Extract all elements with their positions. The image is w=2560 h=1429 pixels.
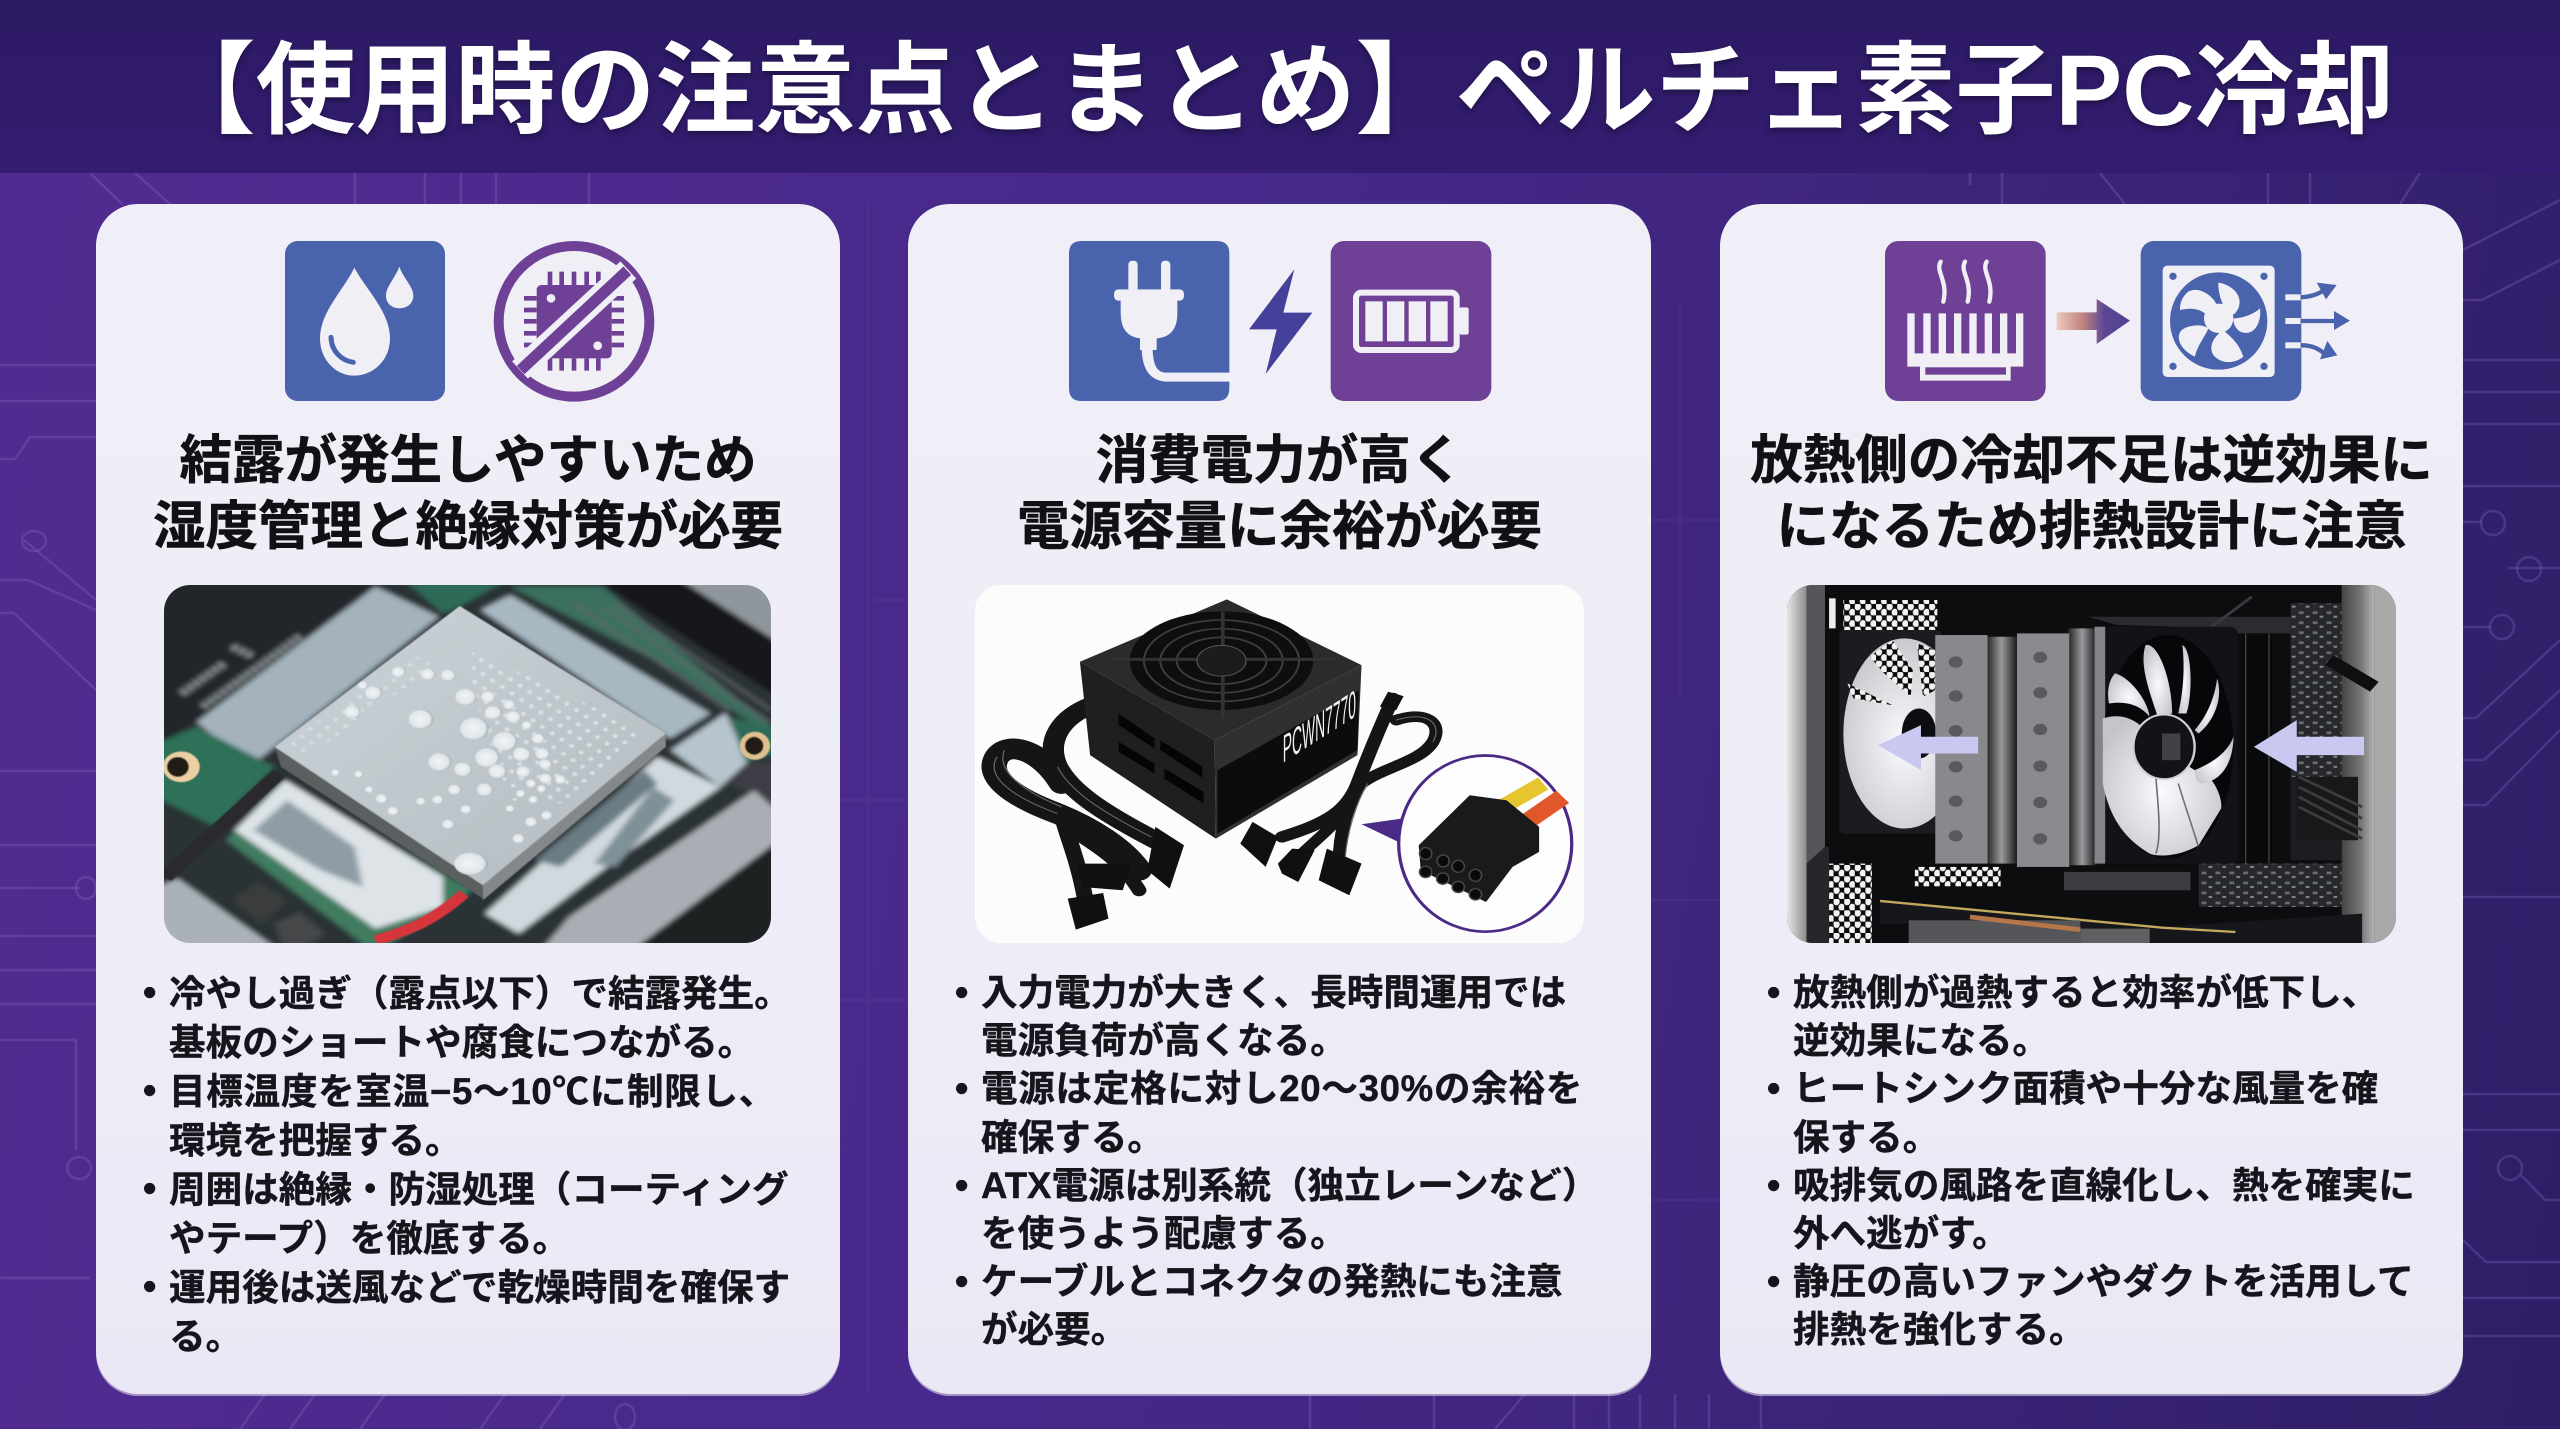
header band: [0, 0, 2560, 173]
icon row: plug, lightning, battery: [1069, 241, 1492, 401]
icon: prohibited chip: [499, 246, 649, 397]
bullet 2: ヒートシンク面積や十分な風量を確: [1793, 1068, 2378, 1109]
bullet list: [955, 972, 1598, 1350]
connector callout: [1362, 755, 1572, 932]
heat sink columns: [1935, 628, 2097, 867]
bullet 4: が必要。: [981, 1309, 1127, 1350]
bullet 3: [1767, 1165, 2415, 1254]
bullet 1: 冷やし過ぎ（露点以下）で結露発生。: [169, 973, 791, 1014]
title: 【使用時の注意点とまとめ】ペルチェ素子PC冷却: [156, 35, 2394, 147]
bullet 4: 運用後は送風などで乾燥時間を確保す: [169, 1267, 790, 1308]
icon: lightning bolt: [1249, 269, 1312, 374]
icon row: heat sink, arrow, fan: [1885, 241, 2350, 401]
icon: heat sink: [1885, 241, 2046, 401]
air flow arrows: [1878, 720, 2364, 772]
bullet 2: [1767, 1068, 2378, 1158]
icon: plug: [1069, 241, 1229, 401]
heading: 消費電力が高く: [1096, 431, 1463, 490]
panel: exhaust heat design: •: [1767, 1068, 1780, 1110]
bullet 3: 外へ逃がす。: [1793, 1213, 2009, 1254]
bullet 4: 静圧の高いファンやダクトを活用して: [1793, 1261, 2414, 1302]
connectors: [1068, 692, 1404, 930]
bullet 2: 確保する。: [981, 1117, 1164, 1158]
bullet 2: 保する。: [1793, 1117, 1939, 1158]
bullet 1: 入力電力が大きく、長時間運用では: [981, 972, 1566, 1013]
heading: [1017, 431, 1542, 556]
heading: 結露が発生しやすいため: [180, 431, 756, 490]
bullet 3: ATX電源は別系統（独立レーンなど）: [981, 1165, 1598, 1206]
photo: power supply unit with connector callout: [975, 585, 1584, 943]
photo: condensation on peltier module: [164, 585, 771, 943]
panel: exhaust heat design: •: [1767, 1261, 1780, 1303]
bullet 2: [143, 1070, 776, 1161]
icon: water drops: [285, 241, 445, 401]
bullet 4: [955, 1261, 1563, 1350]
bullet 1: 放熱側が過熱すると効率が低下し、: [1793, 972, 2378, 1013]
icon: exhaust fan: [2141, 241, 2350, 401]
bullet 3: [143, 1168, 789, 1259]
heading: [153, 431, 783, 556]
bullet 4: [1767, 1261, 2414, 1350]
bullet 3: を使うよう配慮する。: [981, 1213, 1347, 1254]
bullet 4: ケーブルとコネクタの発熱にも注意: [981, 1261, 1563, 1302]
panel: condensation and humidity: •: [143, 1266, 156, 1308]
panel: condensation and humidity: •: [143, 1168, 156, 1210]
bullet 3: [955, 1165, 1598, 1254]
panel: condensation and humidity: [96, 204, 840, 1394]
panel: power consumption: •: [955, 1068, 968, 1110]
panel: condensation and humidity: •: [143, 972, 156, 1014]
bullet list: [143, 972, 791, 1357]
heading: になるため排熱設計に注意: [1776, 497, 2406, 556]
bullet 2: 電源は定格に対し20～30%の余裕を: [981, 1068, 1583, 1109]
bullet 1: [143, 972, 791, 1063]
heading: 湿度管理と絶縁対策が必要: [153, 497, 783, 556]
panel: power consumption: •: [955, 972, 968, 1014]
panel: condensation and humidity: •: [143, 1070, 156, 1112]
bullet 1: [1767, 972, 2378, 1061]
bullet 2: [955, 1068, 1583, 1158]
bullet 4: [143, 1266, 790, 1357]
power supply body: PCWN7770: [1283, 682, 1356, 772]
left fan: [1839, 630, 1966, 834]
cables: [994, 698, 1436, 904]
photo: PC case air flow: [1787, 585, 2396, 943]
bullet 3: やテープ）を徹底する。: [169, 1218, 569, 1259]
bullet 1: [955, 972, 1566, 1061]
bullet 1: 電源負荷が高くなる。: [981, 1020, 1347, 1061]
panel: power consumption: [908, 204, 1651, 1394]
heading: 電源容量に余裕が必要: [1017, 497, 1542, 556]
right fan: [2095, 627, 2238, 864]
bullet 2: 目標温度を室温−5～10℃に制限し、: [169, 1071, 776, 1112]
panel: power consumption: •: [955, 1165, 968, 1207]
panel: exhaust heat design: [1720, 204, 2463, 1394]
panel: exhaust heat design: •: [1767, 972, 1780, 1014]
heading: 放熱側の冷却不足は逆効果に: [1750, 431, 2433, 490]
bullet 1: 逆効果になる。: [1793, 1020, 2049, 1061]
bullet 3: 吸排気の風路を直線化し、熱を確実に: [1793, 1165, 2415, 1206]
power supply body: [1080, 599, 1362, 839]
icon: battery: [1331, 241, 1491, 401]
bullet 4: る。: [169, 1316, 242, 1357]
bullet 2: 環境を把握する。: [169, 1120, 462, 1161]
panel: exhaust heat design: •: [1767, 1165, 1780, 1207]
bullet 4: 排熱を強化する。: [1793, 1309, 2086, 1350]
panel: power consumption: •: [955, 1261, 968, 1303]
icon row: water drop and no-chip: [285, 241, 654, 402]
heading: [1750, 431, 2433, 556]
bullet list: [1767, 972, 2415, 1350]
bullet 1: 基板のショートや腐食につながる。: [169, 1022, 754, 1063]
lower case and GPU: [1829, 864, 2362, 943]
icon: heat flow arrow: [2057, 299, 2130, 344]
bullet 3: 周囲は絶縁・防湿処理（コーティング: [169, 1169, 789, 1210]
